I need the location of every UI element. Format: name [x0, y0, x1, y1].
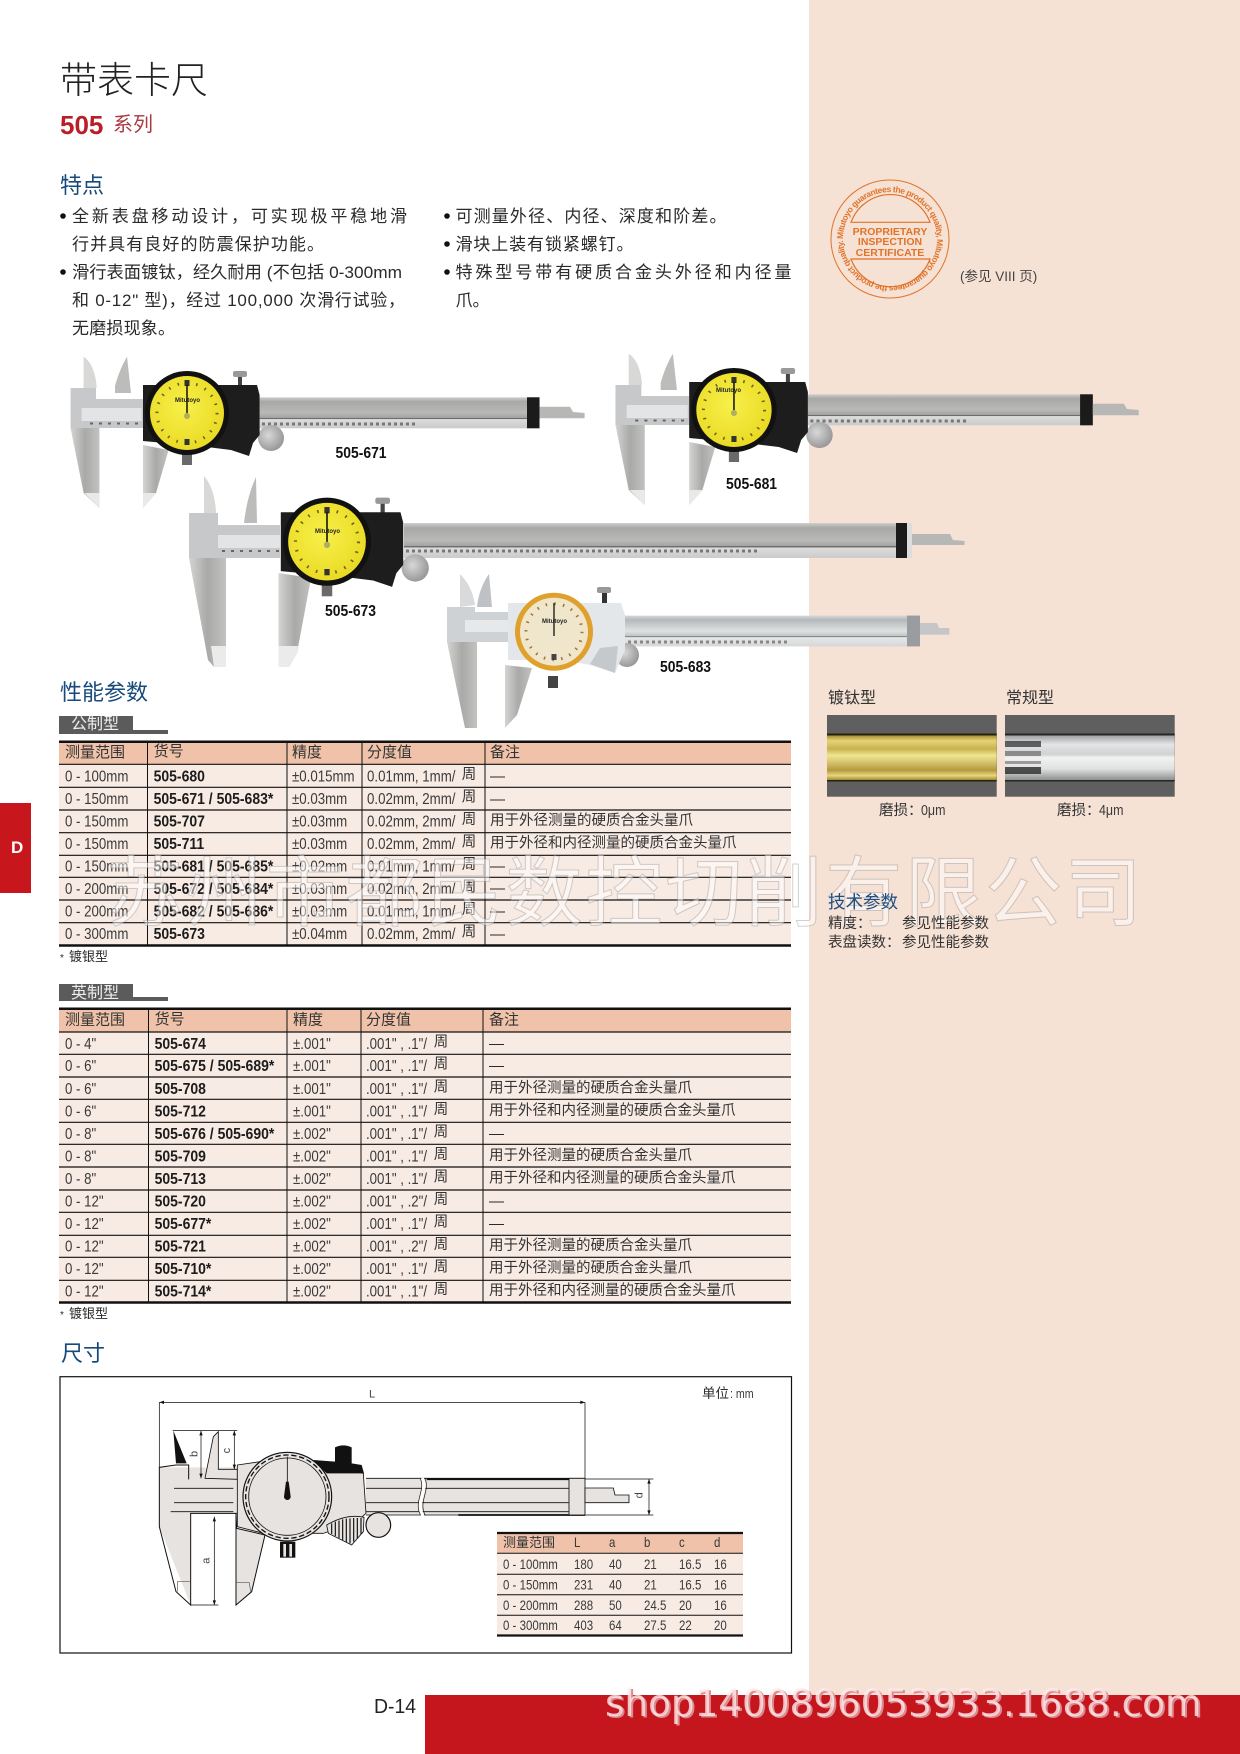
product photo: caliper 505-673: Mitutoyo: [315, 529, 340, 535]
imperial rows: 0 - 12": [65, 1238, 104, 1256]
imperial rows: 周: [434, 1102, 448, 1118]
dimension table rows: 21: [644, 1556, 657, 1572]
imperial rows: 周: [434, 1260, 448, 1276]
metric rows: —: [490, 858, 505, 875]
metric rows: 周: [462, 902, 476, 918]
unit label: 单位: [702, 1386, 729, 1401]
table: metric specifications: [59, 742, 791, 946]
side tab D: [0, 803, 31, 893]
imperial rows: 周: [434, 1147, 448, 1163]
dimension table rows: 0 - 150mm: [503, 1576, 558, 1593]
dimension table rows: 27.5: [644, 1617, 666, 1633]
metric rows: 505-711: [154, 835, 204, 853]
imperial rows: .001" , .1"/: [366, 1036, 428, 1053]
imperial rows: .001" , .1"/: [366, 1148, 428, 1166]
watermark: 苏州市都民数控切削有限公司: [106, 851, 1142, 937]
product label 505-681: 505-681: [726, 475, 777, 493]
metric header row: 备注: [490, 744, 520, 761]
tab: imperial: [59, 984, 168, 1002]
imperial rows: .001" , .2"/: [366, 1238, 428, 1256]
imperial rows: 用于外径测量的硬质合金头量爪: [489, 1260, 692, 1276]
imperial rows: 505-709: [155, 1148, 206, 1166]
imperial rows: 505-714*: [155, 1283, 212, 1301]
imperial rows: 用于外径和内径测量的硬质合金头量爪: [489, 1282, 736, 1299]
dimension table rows: 180: [574, 1556, 593, 1572]
imperial rows: ±.002": [293, 1126, 331, 1143]
footer: red bar: [425, 1695, 1240, 1754]
panel: dimensions: [60, 1377, 792, 1653]
table: dimensions by range: [497, 1533, 743, 1636]
imperial rows: 周: [434, 1237, 448, 1253]
metric rows: 0 - 150mm: [65, 813, 128, 831]
dimension table rows: 22: [679, 1617, 692, 1633]
imperial header row: [65, 1011, 519, 1028]
tab: imperial: 英制型: [71, 984, 119, 1002]
imperial rows: ±.002": [293, 1216, 331, 1233]
imperial header row: 货号: [155, 1011, 185, 1028]
imperial rows: —: [489, 1126, 504, 1142]
metric rows: 505-681 / 505-685*: [154, 858, 273, 876]
metric rows: 505-673: [154, 925, 205, 943]
footer: page number: D-14: [374, 1696, 416, 1718]
imperial rows: ±.002": [293, 1238, 331, 1256]
photo: titanium coated surface: [827, 715, 997, 797]
dimension drawing of caliper: c: [221, 1447, 233, 1453]
dimension table rows: 64: [609, 1617, 622, 1633]
unit label: [702, 1386, 754, 1401]
dimension drawing of caliper: b: [189, 1451, 201, 1457]
metric rows: 0 - 150mm: [65, 858, 128, 876]
dimension table header: [503, 1534, 720, 1550]
imperial rows: 0 - 8": [65, 1126, 96, 1143]
imperial rows: .001" , .1"/: [366, 1261, 428, 1278]
product photo: caliper 505-683: [447, 574, 949, 728]
metric rows: 0.02mm, 2mm/: [367, 881, 456, 898]
imperial rows: 505-708: [155, 1080, 206, 1098]
features list: right column: 可测量外径、内径、深度和阶差。: [456, 207, 726, 226]
product photo: caliper 505-683: Mitutoyo: [542, 619, 567, 625]
metric rows: 周: [462, 857, 476, 873]
imperial header row: 分度值: [366, 1012, 411, 1028]
imperial rows: .001" , .1"/: [366, 1126, 428, 1143]
product photo: caliper 505-671: Mitutoyo: [175, 398, 200, 404]
product label 505-671: 505-671: [336, 444, 387, 462]
imperial rows: 周: [434, 1124, 448, 1140]
metric rows: ±0.03mm: [292, 791, 347, 809]
dimension table rows: 403: [574, 1617, 593, 1633]
metric rows: —: [490, 768, 505, 785]
side tab D: D: [11, 838, 23, 857]
metric rows: 周: [462, 790, 476, 806]
metric rows: 周: [462, 925, 476, 941]
metric rows: ±0.03mm: [292, 836, 347, 853]
stamp: proprietary inspection certificate: [830, 180, 950, 298]
imperial rows: 用于外径测量的硬质合金头量爪: [489, 1237, 692, 1254]
footnote: metric: 镀银型: [69, 949, 108, 964]
imperial rows: .001" , .2"/: [366, 1193, 428, 1211]
imperial rows: 0 - 4": [65, 1036, 96, 1053]
imperial rows: ±.001": [293, 1036, 331, 1053]
caption: wear 4 um: [1057, 802, 1123, 819]
imperial rows: 0 - 12": [65, 1283, 104, 1301]
features list: right column: 特殊型号带有硬质合金头外径和内径量: [456, 263, 792, 282]
imperial rows: 周: [434, 1080, 448, 1096]
metric rows: 0.01mm, 1mm/: [367, 858, 456, 876]
tab: metric: 公制型: [71, 715, 119, 733]
table: imperial specifications: [59, 1009, 791, 1302]
footer: shop url watermark: shop1400896053933.1688.com: [605, 1681, 1201, 1725]
metric rows: ±0.03mm: [292, 881, 347, 898]
metric rows: 周: [462, 812, 476, 828]
imperial rows: .001" , .1"/: [366, 1103, 428, 1121]
metric rows: ±0.02mm: [292, 858, 347, 876]
imperial rows: 0 - 12": [65, 1193, 104, 1211]
dimension table rows: 16.5: [679, 1556, 701, 1572]
imperial rows: —: [489, 1193, 504, 1210]
dimension table rows: 231: [574, 1576, 593, 1593]
caption: wear 4 um: 4μm: [1099, 802, 1123, 818]
features list: right column: 爪。: [456, 291, 490, 310]
footnote: metric: *: [60, 953, 64, 964]
imperial rows: 周: [434, 1214, 448, 1230]
dimension drawing of caliper: [159, 1388, 653, 1605]
dimension table rows: 50: [609, 1597, 622, 1613]
metric header row: 精度: [292, 744, 322, 761]
dimension table rows: 16: [714, 1597, 727, 1613]
imperial rows: 用于外径和内径测量的硬质合金头量爪: [489, 1170, 736, 1186]
metric rows: 0 - 150mm: [65, 791, 128, 809]
imperial rows: 505-674: [155, 1035, 207, 1053]
heading: technical data: 技术参数: [828, 892, 898, 912]
footnote: imperial: *: [60, 1310, 64, 1321]
subtitle: 505 series: 505: [60, 110, 103, 140]
dimension drawing of caliper: d: [634, 1492, 646, 1498]
footnote: imperial: 镀银型: [69, 1306, 108, 1321]
dimension table rows: 0 - 200mm: [503, 1597, 558, 1613]
imperial rows: 周: [434, 1034, 448, 1050]
imperial rows: 505-721: [155, 1238, 206, 1256]
dimension table rows: 40: [609, 1556, 622, 1572]
metric rows: ±0.015mm: [292, 768, 355, 786]
product photo: caliper 505-681: [615, 354, 1139, 505]
note: see page VIII: (参见 VIII 页): [960, 268, 1037, 284]
technical data lines: 表盘读数：: [828, 933, 900, 951]
dimension table rows: 288: [574, 1597, 593, 1613]
dimension table rows: 0 - 100mm: [503, 1556, 558, 1572]
metric rows: 周: [462, 767, 476, 783]
heading: dimensions: 尺寸: [61, 1341, 105, 1366]
metric header row: 货号: [154, 743, 184, 760]
caption: wear 0 um: 0μm: [921, 802, 945, 818]
dimension drawing of caliper: L: [369, 1388, 375, 1400]
dimension table rows: 20: [714, 1617, 727, 1633]
metric rows: 505-682 / 505-686*: [154, 903, 273, 921]
imperial rows: 周: [434, 1282, 448, 1298]
features list: right column: 滑块上装有锁紧螺钉。: [456, 235, 634, 254]
metric rows: 0.02mm, 2mm/: [367, 813, 456, 831]
imperial rows: 0 - 8": [65, 1148, 96, 1166]
imperial rows: 0 - 6": [65, 1081, 96, 1098]
product label 505-683: 505-683: [660, 658, 711, 676]
metric rows: —: [490, 926, 505, 943]
metric rows: 0.01mm, 1mm/: [367, 768, 456, 786]
imperial rows: 505-720: [155, 1193, 206, 1211]
dimension table header: d: [714, 1534, 720, 1550]
imperial rows: 505-676 / 505-690*: [155, 1125, 274, 1143]
technical data lines: 精度：: [828, 915, 872, 932]
stamp: proprietary inspection certificate: PROPRIETARY: [853, 226, 927, 238]
imperial rows: 用于外径测量的硬质合金头量爪: [489, 1147, 692, 1164]
imperial rows: ±.001": [293, 1058, 331, 1075]
features list: left column: 和 0-12" 型)，经过 100,000 次滑行试验，: [72, 291, 405, 310]
imperial rows: 505-677*: [155, 1215, 212, 1233]
imperial rows: .001" , .1"/: [366, 1283, 428, 1301]
imperial rows: .001" , .1"/: [366, 1081, 428, 1098]
imperial rows: 0 - 12": [65, 1216, 104, 1233]
stamp: proprietary inspection certificate: CERTIFICATE: [856, 247, 924, 259]
metric rows: 0.01mm, 1mm/: [367, 903, 456, 921]
metric rows: 用于外径和内径测量的硬质合金头量爪: [490, 834, 737, 852]
stamp: proprietary inspection certificate: Mitutoyo guarantees the product quality.: [838, 240, 943, 292]
imperial rows: [65, 1034, 736, 1301]
imperial rows: ±.002": [293, 1148, 331, 1166]
label: conventional: 常规型: [1006, 689, 1054, 707]
heading: performance parameters: 性能参数: [60, 680, 148, 705]
imperial rows: 用于外径和内径测量的硬质合金头量爪: [489, 1102, 736, 1119]
dimension table header: c: [679, 1534, 685, 1550]
imperial rows: 505-713: [155, 1170, 206, 1188]
imperial rows: ±.002": [293, 1171, 331, 1188]
imperial rows: 0 - 6": [65, 1058, 96, 1075]
technical data lines: [828, 915, 989, 951]
metric rows: 0 - 100mm: [65, 768, 128, 786]
metric rows: 用于外径测量的硬质合金头量爪: [490, 812, 693, 829]
imperial rows: .001" , .1"/: [366, 1171, 428, 1188]
dimension table rows: [503, 1556, 727, 1633]
metric rows: ±0.03mm: [292, 813, 347, 831]
metric rows: [65, 767, 737, 944]
imperial rows: 周: [434, 1192, 448, 1208]
imperial rows: .001" , .1"/: [366, 1216, 428, 1233]
features list: right column: [444, 207, 792, 310]
unit label: : mm: [730, 1386, 754, 1401]
metric rows: 0 - 200mm: [65, 903, 128, 921]
metric rows: —: [490, 791, 505, 808]
metric rows: 0 - 150mm: [65, 836, 128, 853]
metric rows: ±0.03mm: [292, 903, 347, 921]
imperial rows: 0 - 8": [65, 1171, 96, 1188]
label: titanium coated: 镀钛型: [828, 689, 876, 707]
metric rows: 505-680: [154, 768, 205, 786]
features list: left column: [60, 207, 407, 338]
footer: shop url watermark: shop1400896053933.1688.com: [607, 1682, 1203, 1726]
dimension drawing of caliper: a: [200, 1557, 212, 1564]
dimension table header: L: [574, 1534, 580, 1550]
dimension table header: 测量范围: [503, 1535, 555, 1550]
title: 带表卡尺: [60, 60, 208, 101]
metric rows: 0 - 300mm: [65, 926, 128, 944]
photo: conventional surface: [1005, 715, 1175, 797]
stamp: proprietary inspection certificate: Mitutoyo guarantees the product quality,: [837, 186, 942, 238]
metric header row: [65, 743, 520, 761]
dimension table rows: 21: [644, 1576, 657, 1593]
metric rows: 0.02mm, 2mm/: [367, 926, 456, 944]
metric rows: ±0.04mm: [292, 926, 347, 944]
stamp: proprietary inspection certificate: INSPECTION: [858, 236, 922, 248]
caption: wear 4 um: 磨损：: [1057, 802, 1100, 819]
features list: left column: 滑行表面镀钛，经久耐用 (不包括 0-300mm: [72, 263, 402, 282]
caption: wear 0 um: [879, 802, 945, 819]
product photo: caliper 505-681: Mitutoyo: [716, 388, 741, 394]
dimension table rows: 20: [679, 1597, 692, 1613]
imperial rows: 周: [434, 1170, 448, 1186]
subtitle: 505 series: [60, 110, 153, 140]
imperial rows: 505-710*: [155, 1260, 212, 1278]
imperial header row: 精度: [293, 1012, 323, 1028]
imperial rows: 用于外径测量的硬质合金头量爪: [489, 1080, 692, 1096]
imperial rows: ±.001": [293, 1081, 331, 1098]
subtitle: 505 series: 系列: [113, 113, 153, 136]
metric rows: 周: [462, 834, 476, 850]
technical data lines: 参见性能参数: [902, 915, 989, 932]
metric rows: —: [490, 903, 505, 920]
imperial rows: ±.002": [293, 1193, 331, 1211]
pink side panel: [809, 0, 1240, 1696]
imperial rows: 505-675 / 505-689*: [155, 1057, 274, 1075]
dimension table rows: 16: [714, 1576, 727, 1593]
dimension table header: a: [609, 1534, 616, 1550]
imperial rows: 505-712: [155, 1102, 206, 1121]
heading: features: 特点: [60, 173, 104, 198]
imperial rows: 0 - 6": [65, 1103, 96, 1121]
dimension table header: b: [644, 1534, 650, 1550]
metric rows: 505-707: [154, 813, 205, 831]
features list: left column: 全新表盘移动设计，可实现极平稳地滑: [72, 207, 407, 226]
imperial rows: —: [489, 1036, 504, 1052]
product photo: caliper 505-671: [71, 357, 585, 508]
metric rows: 0 - 200mm: [65, 881, 128, 898]
dimension table rows: 16.5: [679, 1576, 701, 1593]
product photo: caliper 505-673: [189, 476, 964, 667]
product label 505-673: 505-673: [325, 602, 376, 620]
dimension table rows: 16: [714, 1556, 727, 1572]
metric rows: 0.02mm, 2mm/: [367, 836, 456, 853]
features list: left column: 行并具有良好的防震保护功能。: [72, 235, 324, 254]
imperial rows: 周: [434, 1056, 448, 1072]
technical data lines: 参见性能参数: [902, 934, 989, 951]
metric rows: —: [490, 880, 505, 897]
imperial header row: 备注: [489, 1012, 519, 1028]
imperial rows: ±.001": [293, 1103, 331, 1121]
dimension table rows: 0 - 300mm: [503, 1617, 558, 1633]
tab: metric: [59, 715, 168, 734]
imperial rows: ±.002": [293, 1261, 331, 1278]
metric rows: 0.02mm, 2mm/: [367, 791, 456, 809]
imperial header row: 测量范围: [65, 1012, 125, 1028]
features list: left column: 无磨损现象。: [72, 319, 175, 338]
dimension table rows: 24.5: [644, 1597, 666, 1613]
imperial rows: —: [489, 1216, 504, 1232]
metric header row: 测量范围: [65, 744, 125, 761]
caption: wear 0 um: 磨损：: [879, 802, 922, 819]
metric rows: 505-671 / 505-683*: [154, 790, 273, 808]
dimension table rows: 40: [609, 1576, 622, 1593]
imperial rows: —: [489, 1058, 504, 1074]
imperial rows: ±.002": [293, 1283, 331, 1301]
metric rows: 505-672 / 505-684*: [154, 880, 273, 898]
imperial rows: 0 - 12": [65, 1261, 104, 1278]
metric header row: 分度值: [367, 744, 412, 761]
imperial rows: .001" , .1"/: [366, 1058, 428, 1075]
metric rows: 周: [462, 879, 476, 895]
